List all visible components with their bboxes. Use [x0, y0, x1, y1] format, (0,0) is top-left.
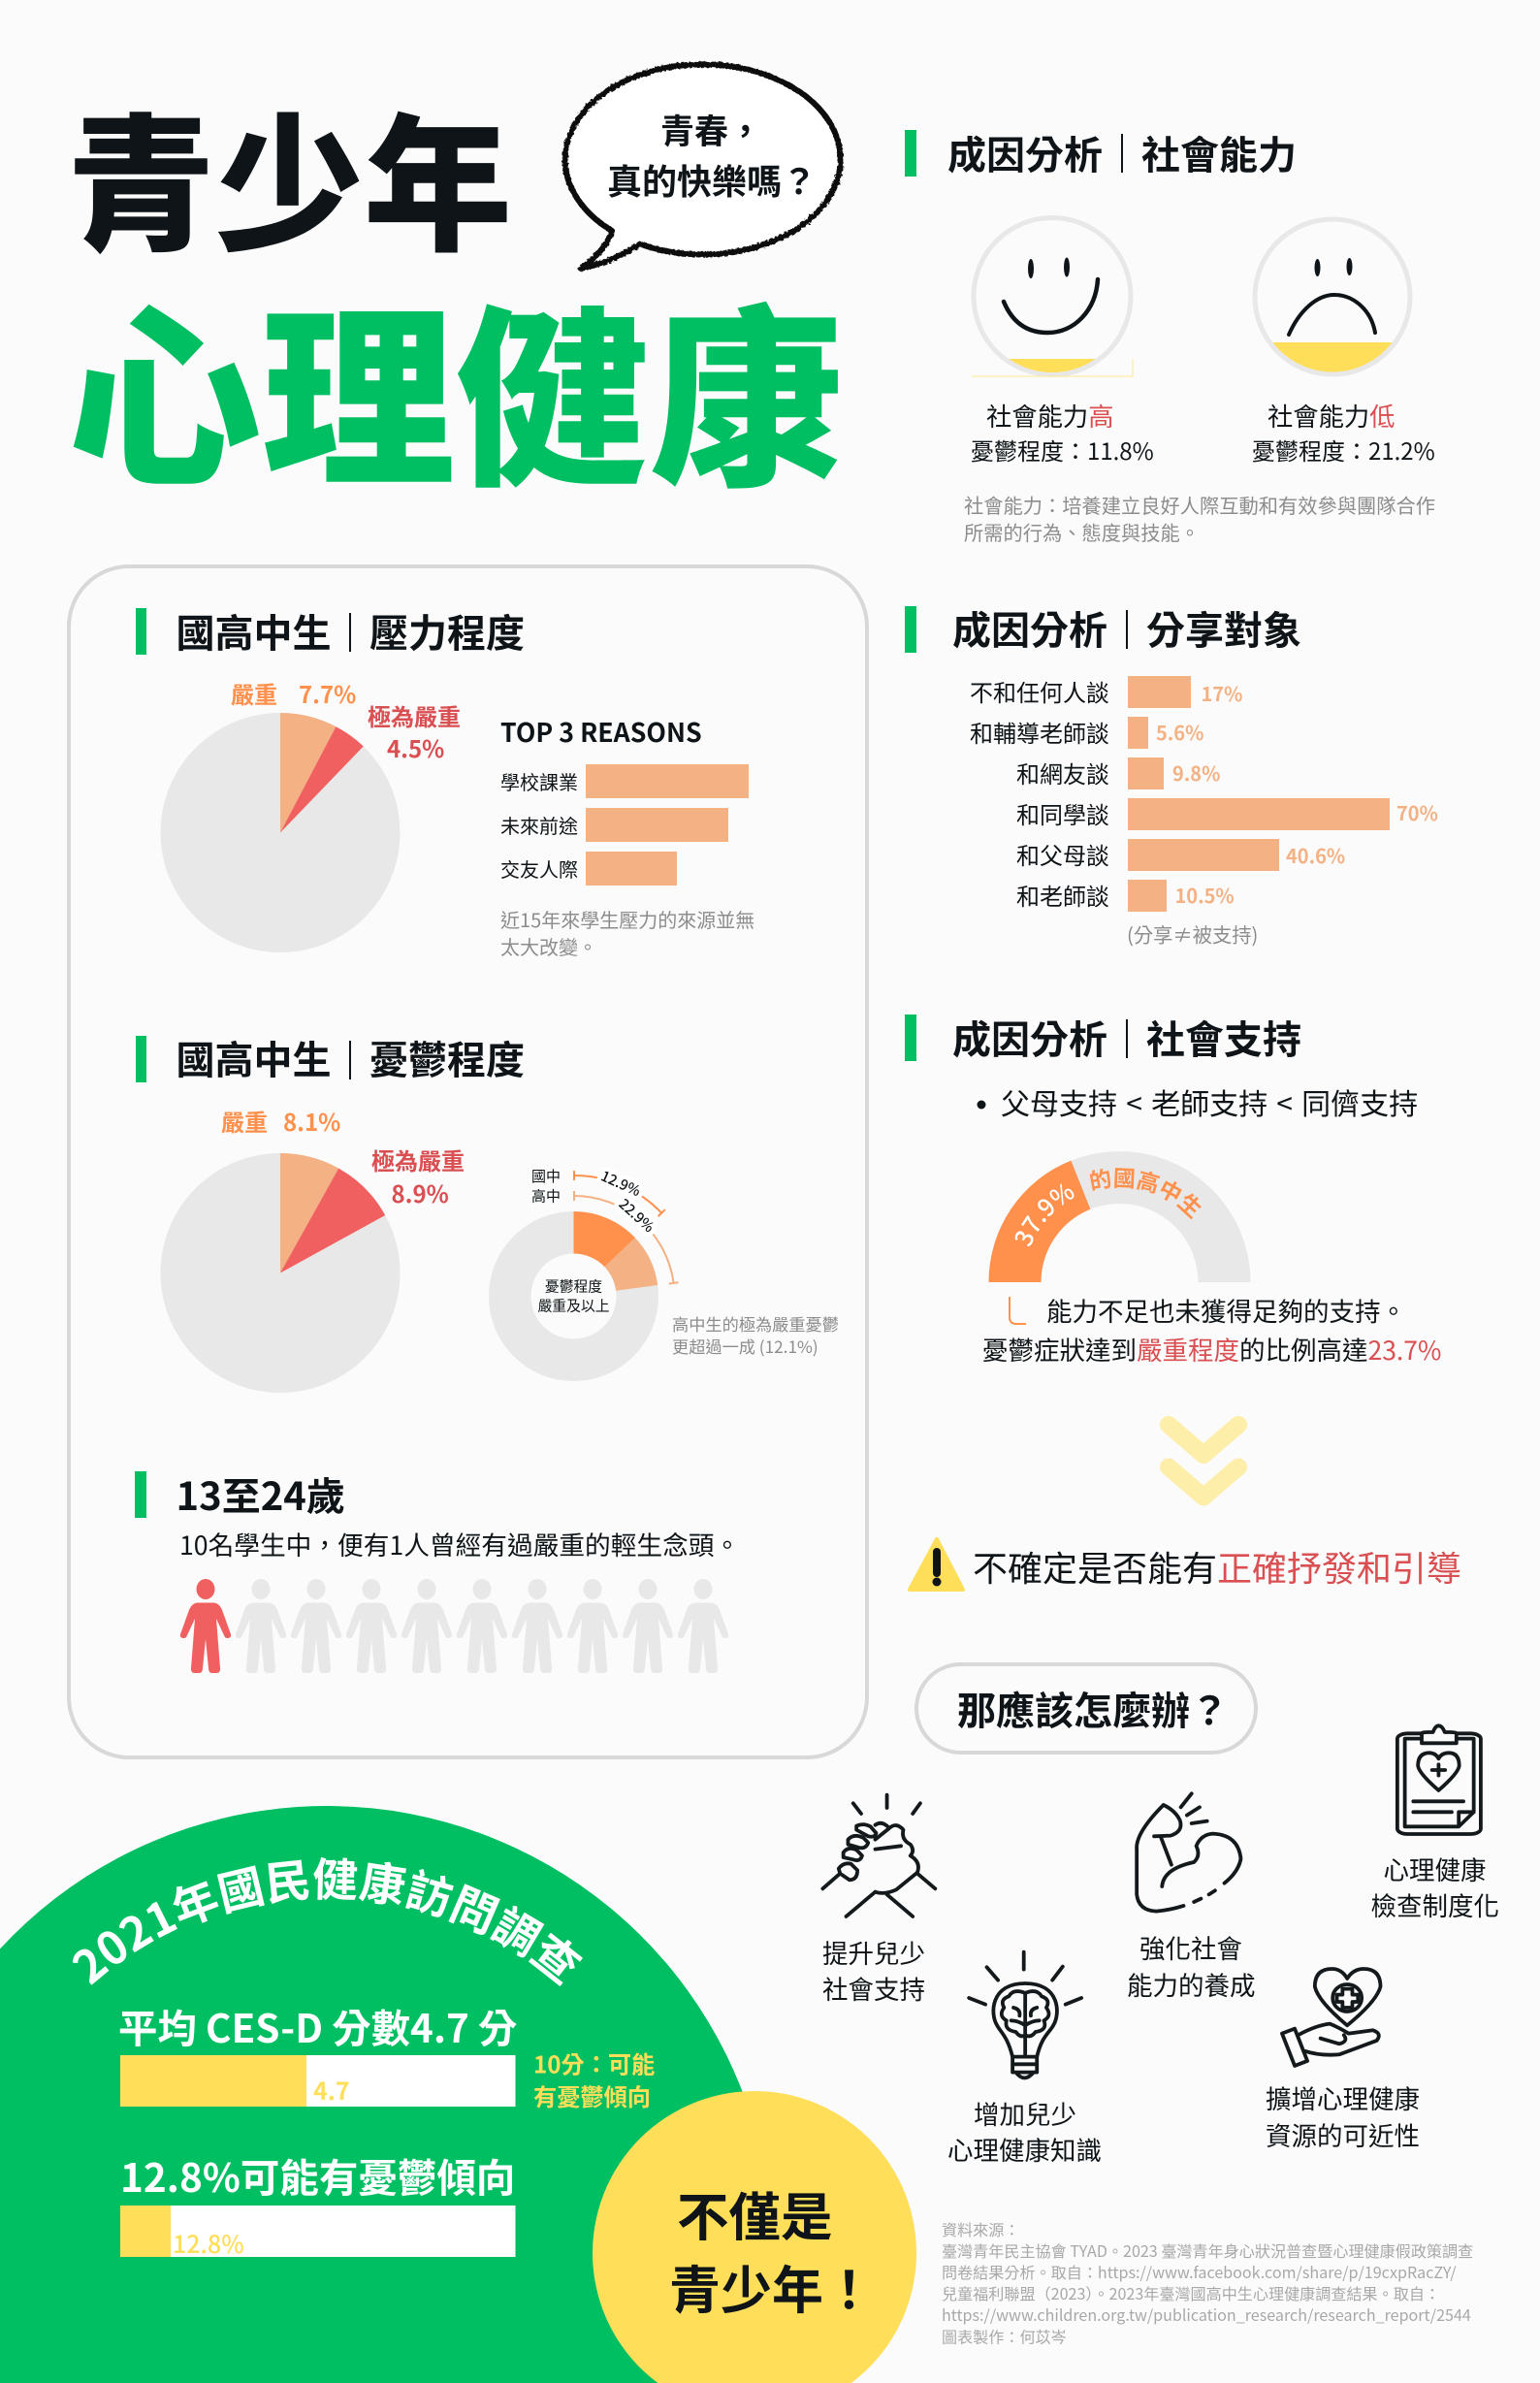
label: 心理健康檢查制度化: 檢查制度化	[1371, 1885, 1499, 1923]
bar chart: 分享對象: 40.6%	[1286, 841, 1345, 869]
bar chart: TOP 3 REASONS: 學校課業	[500, 767, 578, 795]
heading: 13至24歲: 13至24歲	[176, 1465, 345, 1522]
pie label: 嚴重 8.1%: 嚴重	[221, 1104, 268, 1138]
icon: hand holding heart	[1282, 1969, 1380, 2066]
pill heading: 那應該怎麼辦？: 那應該怎麼辦？	[957, 1680, 1229, 1736]
icon: clipboard with heart	[1397, 1725, 1481, 1834]
label: 擴增心理健康資源的可近性	[1266, 2078, 1420, 2153]
bar chart: 分享對象: 10.5%	[1175, 881, 1235, 909]
speech bubble: 青春，真的快樂嗎？: 青春，	[660, 105, 762, 154]
panel: 2021年國民健康訪問調查	[0, 1806, 743, 2383]
pictogram: 10 people	[180, 1579, 728, 1673]
label: 社會能力低: 社會能力低	[1267, 396, 1395, 434]
bar chart: TOP 3 REASONS: TOP 3 REASONS	[500, 712, 702, 750]
heading: 分享對象: 分享對象	[1146, 599, 1301, 656]
bar chart: 分享對象: 和同學談	[1016, 796, 1109, 830]
heading: 社會支持	[905, 1009, 1301, 1065]
bar: CES-D 分數: 4.7	[313, 2073, 350, 2108]
heading: 社會支持: 社會支持	[1146, 1009, 1301, 1065]
speech bubble: 青春，真的快樂嗎？	[565, 64, 841, 269]
label: 心理健康檢查制度化	[1371, 1850, 1499, 1923]
note: 分享不等於被支持: (分享≠被支持)	[1127, 919, 1258, 949]
note: 社會能力定義: 所需的行為、態度與技能。	[964, 518, 1200, 546]
bar chart: 分享對象: 5.6%	[1156, 718, 1203, 746]
pie label: 極為嚴重 4.5%: 極為嚴重	[368, 698, 461, 732]
note: 壓力來源	[500, 905, 754, 960]
pie chart: 壓力程度	[161, 713, 400, 952]
label: 增加兒少心理健康知識: 增加兒少	[974, 2094, 1076, 2132]
label: 社會能力高: 社會能力高	[986, 396, 1113, 434]
label: 社會能力高	[971, 396, 1154, 467]
pie label: 極為嚴重 4.5%: 4.5%	[387, 730, 444, 764]
icon: warning triangle	[910, 1539, 963, 1590]
bar chart: 分享對象	[970, 674, 1438, 912]
note: 高中生極為嚴重憂鬱	[672, 1311, 839, 1358]
label: 提升兒少社會支持	[822, 1933, 925, 2007]
note: 社會能力定義: 社會能力：培養建立良好人際互動和有效參與團隊合作	[964, 491, 1435, 519]
sources: 圖表製作：何苡岑	[942, 2324, 1067, 2347]
pie label: 嚴重 8.1%	[221, 1104, 340, 1138]
note: 壓力來源: 近15年來學生壓力的來源並無	[500, 905, 754, 933]
heading: 壓力程度: 壓力程度	[369, 602, 525, 659]
label: 增加兒少心理健康知識	[947, 2094, 1102, 2168]
panel: 國高中生	[69, 566, 867, 1757]
donut chart: 國中高中比較: 12.9%	[597, 1166, 644, 1201]
gauge chart: 37.9% 的國高中生: 的國高中生	[1090, 1168, 1202, 1220]
sources: 臺灣青年民主協會 TYAD。2023 臺灣青年身心狀況普查暨心理健康假政策調查	[942, 2238, 1473, 2262]
gauge chart: 37.9% 的國高中生: 37.9%	[1014, 1183, 1075, 1247]
stat heading: 12.8%可能有憂鬱傾向: 12.8%可能有憂鬱傾向	[120, 2146, 515, 2204]
note: 高中生極為嚴重憂鬱: 高中生的極為嚴重憂鬱	[672, 1311, 839, 1336]
label: 社會能力高: 憂鬱程度：11.8%	[971, 433, 1154, 467]
pie label: 嚴重 7.7%: 嚴重	[231, 676, 277, 710]
heading: 成因分析｜社會能力: 成因分析	[947, 124, 1103, 180]
note: 10分可能有憂鬱傾向: 有憂鬱傾向	[533, 2078, 651, 2112]
bar chart: 分享對象: 和網友談	[1016, 756, 1109, 789]
stat heading: 平均 CES-D 分數4.7 分: 平均 CES-D 分數4.7 分	[118, 1997, 517, 2054]
note: 壓力來源: 太大改變。	[500, 932, 597, 960]
note: 高中生極為嚴重憂鬱: 更超過一成 (12.1%)	[672, 1334, 818, 1358]
arrow: double chevron	[1169, 1425, 1238, 1497]
heading: 壓力程度: 國高中生	[176, 602, 332, 659]
sources: 兒童福利聯盟（2023）。2023年臺灣國高中生心理健康調查結果。取自：	[942, 2281, 1440, 2304]
text: 憂鬱症狀嚴重程度 23.7%: 憂鬱症狀達到嚴重程度的比例高達23.7%	[982, 1330, 1441, 1368]
bar: 12.8%: 12.8%	[173, 2226, 244, 2261]
donut chart: 國中高中比較: 高中	[531, 1185, 561, 1207]
bar chart: TOP 3 REASONS: 未來前途	[500, 811, 578, 839]
label: 提升兒少社會支持: 提升兒少	[822, 1933, 925, 1971]
label: 擴增心理健康資源的可近性: 擴增心理健康	[1266, 2078, 1420, 2116]
icon: smiling face	[970, 217, 1135, 378]
callout: 不僅是青少年！: 不僅是	[677, 2176, 832, 2251]
bar: CES-D 分數	[120, 2055, 516, 2108]
label: 社會能力低: 憂鬱程度：21.2%	[1252, 433, 1435, 467]
pie label: 嚴重 7.7%: 7.7%	[299, 676, 356, 710]
donut chart: 國中高中比較: 國中	[531, 1166, 561, 1186]
bar chart: TOP 3 REASONS	[500, 712, 749, 886]
bar chart: 分享對象: 70%	[1396, 798, 1438, 826]
curved heading: 2021年國民健康訪問調查: 2021年國民健康訪問調查	[72, 1856, 583, 1986]
text: 不確定是否能有正確抒發和引導: 不確定是否能有正確抒發和引導	[973, 1541, 1461, 1592]
pie label: 極為嚴重 8.9%	[371, 1143, 465, 1209]
label: 擴增心理健康資源的可近性: 資源的可近性	[1266, 2115, 1420, 2153]
text: 能力不足也未獲得足夠的支持: 能力不足也未獲得足夠的支持。	[1046, 1291, 1406, 1329]
heading: 成因分析｜社會能力: 社會能力	[1141, 124, 1297, 180]
donut chart: 國中高中比較: 嚴重及以上	[537, 1296, 610, 1315]
icon: light bulb with brain	[969, 1952, 1081, 2077]
label: 強化社會能力的養成: 能力的養成	[1127, 1965, 1255, 2003]
donut chart: 國中高中比較	[489, 1166, 679, 1381]
heading: 憂鬱程度: 國高中生	[176, 1029, 332, 1085]
heading: 成因分析｜社會能力	[905, 124, 1297, 180]
label: 強化社會能力的養成: 強化社會	[1139, 1928, 1242, 1966]
icon: flexed arm	[1137, 1793, 1240, 1912]
bar chart: 分享對象: 不和任何人談	[970, 674, 1109, 708]
heading: 壓力程度	[136, 602, 525, 659]
heading: 社會支持: 成因分析	[952, 1009, 1107, 1065]
pie label: 嚴重 7.7%	[231, 676, 356, 710]
speech bubble: 青春，真的快樂嗎？: 真的快樂嗎？	[607, 154, 817, 205]
note: 10分可能有憂鬱傾向	[533, 2046, 655, 2112]
sources: https://www.children.org.tw/publication_research/research_report/2544	[942, 2302, 1471, 2326]
label: 心理健康檢查制度化: 心理健康	[1383, 1850, 1486, 1887]
pie label: 極為嚴重 8.9%: 極為嚴重	[371, 1143, 465, 1176]
icon: sad face	[1251, 219, 1416, 381]
pie label: 極為嚴重 8.9%: 8.9%	[392, 1175, 449, 1209]
heading: 憂鬱程度	[136, 1029, 525, 1085]
bar: 12.8%	[120, 2206, 516, 2261]
callout: 不僅是青少年！: 青少年！	[669, 2250, 875, 2324]
title: 青少年: 青少年	[67, 68, 512, 282]
pie label: 嚴重 8.1%: 8.1%	[283, 1104, 340, 1138]
donut chart: 國中高中比較: 22.9%	[615, 1194, 659, 1237]
label: 提升兒少社會支持: 社會支持	[822, 1969, 925, 2007]
heading: 分享對象: 成因分析	[952, 599, 1107, 656]
sources	[942, 2217, 1473, 2347]
donut chart: 國中高中比較: 憂鬱程度	[545, 1276, 602, 1296]
sources: 資料來源：	[942, 2217, 1019, 2240]
bar chart: TOP 3 REASONS: 交友人際	[500, 854, 578, 883]
label: 增加兒少心理健康知識: 心理健康知識	[947, 2130, 1102, 2168]
bullet: 支持比較: 父母支持 < 老師支持 < 同儕支持	[1001, 1080, 1418, 1123]
bar chart: 分享對象: 17%	[1201, 679, 1242, 707]
bar chart: 分享對象: 和輔導老師談	[970, 715, 1109, 749]
heading: 憂鬱程度: 憂鬱程度	[369, 1029, 525, 1085]
gauge chart: 37.9% 的國高中生	[989, 1151, 1251, 1282]
note: 社會能力定義	[964, 491, 1435, 546]
pill heading: 那應該怎麼辦？	[916, 1664, 1256, 1753]
label: 強化社會能力的養成	[1127, 1928, 1255, 2003]
bar chart: 分享對象: 和老師談	[1016, 878, 1109, 912]
pie chart: 憂鬱程度	[161, 1153, 400, 1393]
bar chart: 分享對象: 9.8%	[1172, 758, 1220, 787]
sources: 問卷結果分析。取自：https://www.facebook.com/share/p/19cxpRacZY/	[942, 2260, 1457, 2283]
icon: handshake	[822, 1795, 935, 1916]
bar chart: 分享對象: 和父母談	[1016, 837, 1109, 871]
text: 輕生念頭: 10名學生中，便有1人曾經有過嚴重的輕生念頭。	[179, 1525, 740, 1562]
pie label: 極為嚴重 4.5%	[368, 698, 461, 764]
callout: 不僅是青少年！	[593, 2091, 916, 2383]
label: 社會能力低	[1252, 396, 1435, 467]
note: 10分可能有憂鬱傾向: 10分：可能	[533, 2046, 655, 2079]
heading: 分享對象	[905, 599, 1301, 656]
title: 心理健康: 心理健康	[68, 244, 844, 526]
